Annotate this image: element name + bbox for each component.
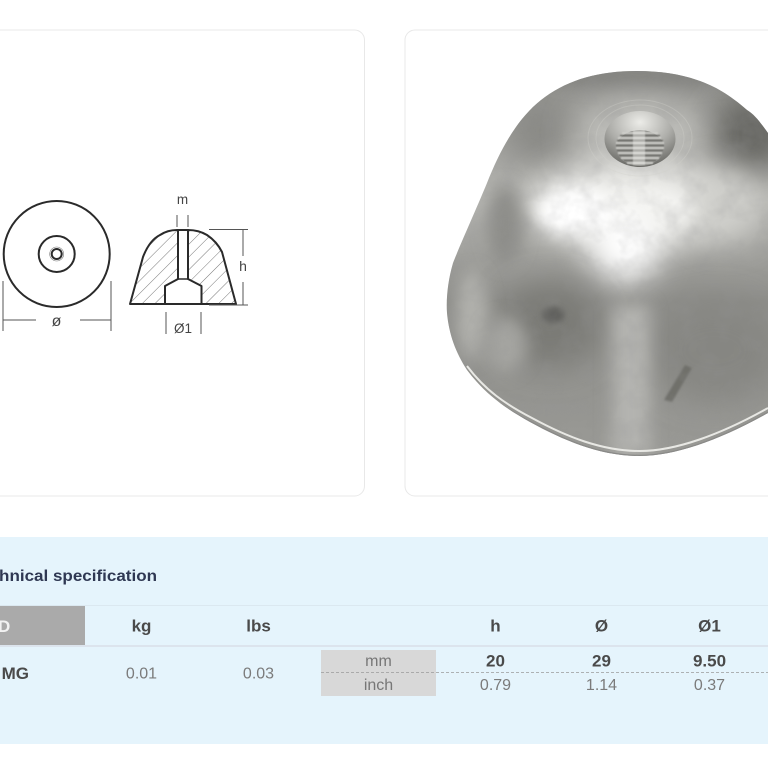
dimension: outer diameter [3,281,111,331]
table header labels: kg [132,616,151,636]
inch values [480,677,725,694]
panel: technical drawing [0,30,364,496]
dimension: thread m: m [177,192,188,207]
millimetre values: 29 [592,652,611,670]
icon: threaded hole [588,100,692,176]
table header labels: h [490,616,501,636]
millimetre values: 20 [486,652,505,670]
dimension: base diameter: Ø1 [174,321,192,336]
dimension: height h [209,230,248,305]
table header: ID cell [0,606,85,645]
millimetre values [486,652,726,670]
table [0,606,768,696]
inch values: 0.37 [694,677,725,694]
unit labels: mm [365,653,392,670]
unit cell [321,650,436,696]
anode rim highlight [467,366,768,451]
row weights: 0.01 [126,666,157,682]
dimension: thread m [177,192,188,227]
icon: section view drawing [130,230,236,304]
icon: top view drawing [4,201,110,307]
inch values: 1.14 [586,677,617,694]
table header labels [132,616,721,636]
table header labels: lbs [246,616,271,636]
row id: MG [2,664,29,683]
table header labels: Ø1 [698,616,721,636]
unit labels: inch [364,677,393,694]
dimension: base diameter [166,312,201,336]
row weights: 0.03 [243,666,274,682]
dimension: height h: h [239,258,247,274]
panel: product photo [405,30,768,496]
row weights [126,666,274,682]
inch values: 0.79 [480,677,511,694]
table header labels: Ø [595,616,608,636]
photo: zinc anode [440,65,768,460]
millimetre values: 9.50 [693,652,726,670]
panel: technical specification [0,537,768,744]
dimension: outer diameter: ø [52,313,62,330]
unit labels [364,653,393,694]
